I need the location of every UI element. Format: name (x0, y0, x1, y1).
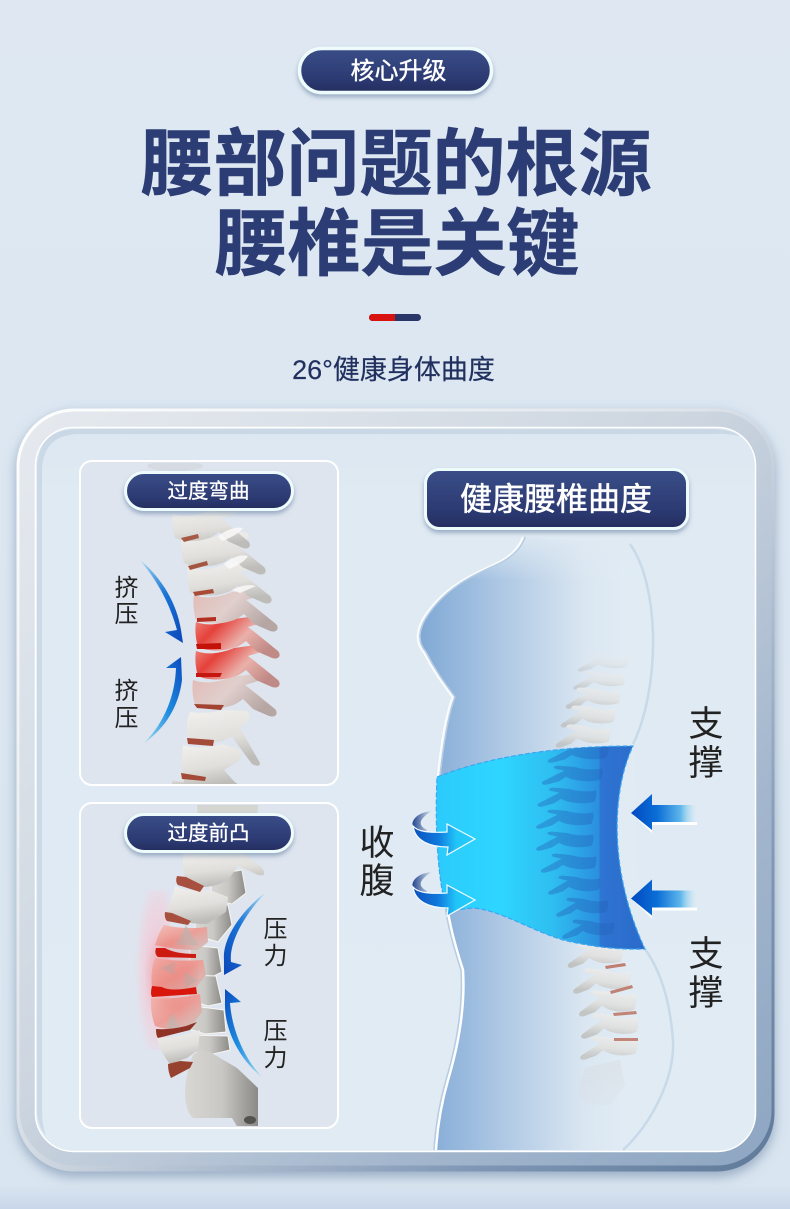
label: 支撑 lower: 支 (688, 935, 724, 974)
label: 支撑 lower (688, 935, 724, 1013)
badge: 过度前凸 (126, 814, 292, 852)
label: 收腹 (359, 824, 395, 901)
discs (176, 876, 204, 892)
label: 压力 lower (264, 1018, 288, 1072)
vertebra bodies (183, 850, 264, 887)
processes (185, 870, 246, 1056)
panel: excessive bending (80, 461, 338, 788)
faded spine lower (568, 944, 638, 1075)
label: 压力: 力 (264, 943, 288, 970)
arrow: pressure lower (225, 989, 262, 1077)
label: 支撑 lower: 撑 (688, 974, 724, 1013)
badge: 过度弯曲: 过度弯曲 (168, 480, 250, 503)
label: 压力 (264, 916, 288, 970)
label: 挤压: 挤 (114, 575, 138, 602)
label: 挤压 lower: 挤 (114, 678, 138, 705)
process highlights (218, 528, 256, 593)
subtitle: 26°健康身体曲度 (292, 355, 495, 385)
badge: 健康腰椎曲度: 健康腰椎曲度 (460, 481, 652, 517)
faded spine upper (556, 662, 627, 748)
curved arrow upper (412, 811, 475, 855)
panel: healthy lumbar curve (359, 470, 724, 1150)
red glow (130, 890, 170, 1050)
badge: 过度弯曲 (126, 472, 292, 510)
panel: excessive lordosis (80, 803, 338, 1128)
label: 压力 lower: 力 (264, 1045, 288, 1072)
label: 挤压: 压 (114, 601, 138, 628)
label: 收腹: 收 (359, 824, 395, 863)
spine illustration: excessive bending (147, 461, 280, 788)
badge: 过度前凸: 过度前凸 (168, 822, 250, 845)
label: 支撑 upper (688, 705, 724, 783)
label: 挤压 lower (114, 678, 138, 732)
label: 支撑 upper: 撑 (688, 744, 724, 783)
lumbar support belt (436, 744, 645, 949)
badge: 健康腰椎曲度 (426, 470, 688, 528)
label: 挤压 (114, 575, 138, 628)
title (140, 124, 652, 285)
red glow overlay (150, 937, 194, 1013)
top badge: 核心升级: 核心升级 (350, 58, 446, 85)
straight arrow upper (631, 794, 697, 833)
torso silhouette (418, 537, 673, 1150)
curved arrow lower (412, 872, 475, 916)
gray patches on bodies (160, 925, 198, 1028)
label: 压力 lower: 压 (264, 1018, 288, 1045)
label: 收腹: 腹 (359, 862, 395, 901)
label: 挤压 lower: 压 (114, 705, 138, 732)
spine illustration: excessive lordosis (150, 805, 264, 1128)
label: 支撑 upper: 支 (688, 705, 724, 744)
straight arrow lower (631, 880, 697, 918)
arrow: compression upper (140, 560, 183, 643)
arrow: compression lower (144, 657, 182, 743)
top badge: 核心升级 (300, 48, 492, 92)
title: 腰部问题的根源 (140, 124, 652, 205)
sacrum (185, 1051, 258, 1128)
label: 压力: 压 (264, 916, 288, 943)
title: 腰椎是关键 (214, 204, 580, 285)
arrow: pressure upper (224, 893, 265, 975)
divider accent bar (369, 314, 421, 321)
main frame panel (16, 408, 774, 1172)
spine seen through belt (536, 744, 614, 939)
